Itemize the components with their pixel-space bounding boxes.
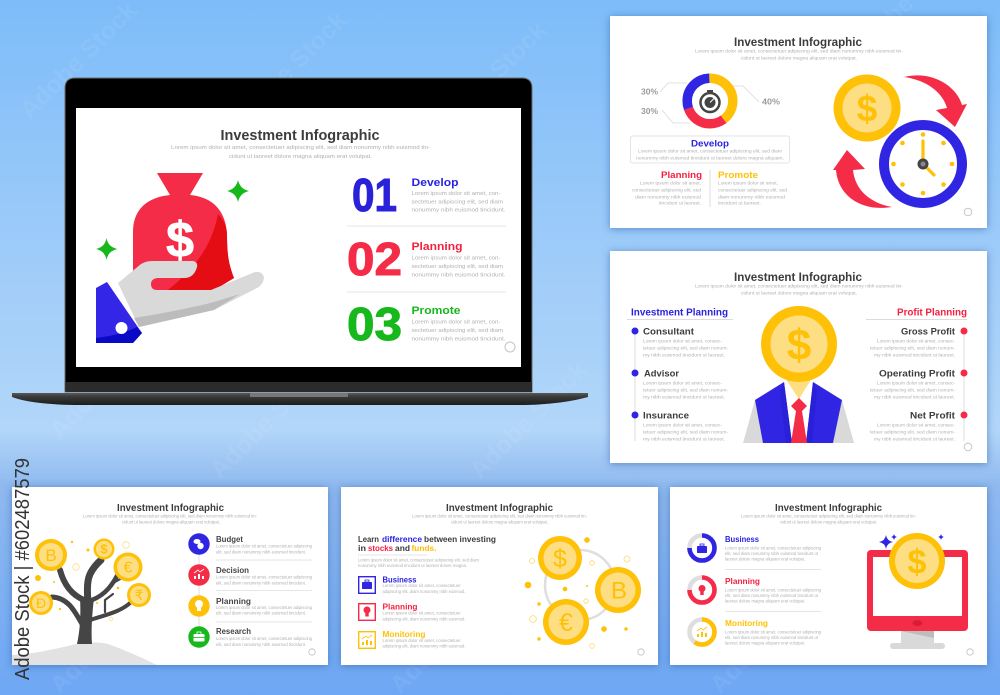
planning text: diam nonummy nibh euismod bbox=[635, 194, 702, 200]
business item: Business bbox=[382, 576, 417, 584]
advisor: Lorem ipsum dolor sit amet, consec- bbox=[643, 380, 723, 386]
gross profit: Gross Profit bbox=[901, 326, 956, 338]
consultant: Lorem ipsum dolor sit amet, consec- bbox=[643, 338, 723, 344]
left timeline bbox=[632, 328, 638, 441]
monitoring item: Monitoring bbox=[382, 630, 426, 639]
step 03 text: nonummy nibh euismod tincidunt. bbox=[412, 336, 506, 342]
slide background bbox=[341, 487, 658, 665]
page number badge bbox=[638, 649, 644, 655]
planning item: Planning bbox=[382, 602, 418, 612]
donut chart: 30% bbox=[641, 86, 658, 96]
step 01 text bbox=[412, 177, 506, 214]
icon: money bag in hand: $ bbox=[166, 212, 194, 268]
slide background bbox=[610, 16, 987, 228]
operating profit: Operating Profit bbox=[879, 368, 956, 380]
slide background bbox=[12, 487, 328, 665]
step 02 text: Lorem ipsum dolor sit amet, con- bbox=[412, 256, 501, 262]
consultant: my nibh euismod tincidunt ut laoreet. bbox=[643, 352, 725, 358]
research item bbox=[188, 626, 313, 648]
step 03 text: Promote bbox=[412, 305, 460, 317]
icon: clock bbox=[884, 125, 962, 203]
arrow: top right bbox=[904, 75, 967, 127]
icon: money tree bbox=[52, 560, 130, 644]
business ring item: elit, sed diam nonummy nibh euismod tincidunt ut bbox=[725, 551, 819, 556]
slide title: Investment Infographic bbox=[117, 503, 224, 514]
icon: euro coin bbox=[114, 552, 142, 582]
panel: laptop mockup bbox=[12, 78, 588, 405]
intro text: cidunt ut laoreet dolore magna aliquam erat volutpat. bbox=[780, 520, 877, 524]
icon: businessman with coin head bbox=[743, 306, 854, 443]
panel: slide tree bbox=[12, 487, 328, 665]
icon: dollar coin bbox=[538, 536, 582, 580]
headline: stocks bbox=[368, 544, 393, 553]
decorative coin dots bbox=[525, 537, 630, 648]
icon: hill bbox=[12, 642, 157, 665]
consultant bbox=[643, 326, 729, 358]
icon: dollar coin: $ bbox=[100, 542, 108, 556]
budget item: Lorem ipsum dolor sit amet, consectetuer adipiscing bbox=[216, 544, 313, 548]
slide background bbox=[610, 251, 987, 463]
decision item: Lorem ipsum dolor sit amet, consectetuer adipiscing bbox=[216, 574, 313, 580]
step 03 text bbox=[412, 305, 506, 342]
monitoring item: Lorem ipsum dolor sit amet, consectetuer bbox=[382, 638, 461, 643]
step 03 number: 03 bbox=[347, 298, 402, 350]
decorative coin dots bbox=[35, 541, 129, 621]
page number badge bbox=[964, 208, 972, 216]
headline description bbox=[358, 558, 479, 568]
advisor: Advisor bbox=[644, 368, 679, 380]
planning text: tincidunt ut laoreet. bbox=[659, 200, 701, 206]
right timeline bbox=[960, 328, 968, 441]
planning item bbox=[359, 602, 466, 621]
icon: sparkle small bbox=[96, 238, 118, 260]
insurance: my nibh euismod tincidunt ut laoreet. bbox=[643, 436, 725, 442]
page number badge bbox=[309, 649, 315, 655]
gross profit: my nibh euismod tincidunt ut laoreet. bbox=[874, 352, 955, 358]
laptop intro text bbox=[171, 145, 430, 160]
research item: elit, sed diam nonummy nibh euismod tincidunt. bbox=[216, 642, 306, 647]
planning item: Planning bbox=[216, 597, 251, 606]
icon: dollar coin bbox=[889, 533, 945, 589]
donut chart: 30% bbox=[641, 106, 658, 116]
develop box bbox=[630, 136, 790, 163]
watermarks: Adobe Stock bbox=[44, 316, 172, 444]
gross profit: Lorem ipsum dolor sit amet, consec- bbox=[877, 338, 956, 344]
consultant: Consultant bbox=[643, 326, 695, 338]
watermarks: Adobe Stock bbox=[424, 16, 552, 144]
consultant: tetuer adipiscing elit, sed diam nonum- bbox=[643, 346, 729, 350]
step 03 text: sectetuer adipiscing elit, sed diam bbox=[412, 328, 504, 334]
intro text bbox=[741, 514, 916, 524]
connecting ring bbox=[545, 550, 615, 620]
step 01 text: sectetuer adipiscing elit, sed diam bbox=[412, 199, 504, 205]
advisor: tetuer adipiscing elit, sed diam nonum- bbox=[643, 388, 729, 392]
icon: bitcoin coin bbox=[595, 567, 641, 613]
icon: dollar coin: $ bbox=[908, 544, 927, 582]
advisor: my nibh euismod tincidunt ut laoreet. bbox=[643, 394, 725, 400]
icon: rupee coin: ₹ bbox=[135, 588, 144, 604]
laptop intro text: cidunt ut laoreet dolore magna aliquam erat volutpat. bbox=[229, 154, 372, 160]
laptop screen bbox=[76, 108, 521, 367]
decision item: Decision bbox=[216, 566, 249, 575]
page number badge bbox=[505, 342, 515, 352]
headline: and bbox=[395, 544, 410, 553]
intro text bbox=[412, 514, 587, 524]
arrow: bottom left bbox=[833, 150, 892, 208]
planning item bbox=[188, 595, 313, 617]
heading: profit planning: Profit Planning bbox=[897, 308, 967, 318]
insurance: Lorem ipsum dolor sit amet, consec- bbox=[643, 422, 723, 428]
insurance: Insurance bbox=[643, 410, 689, 422]
panel: slide planning person bbox=[610, 251, 987, 463]
promote text: Promote bbox=[718, 170, 758, 180]
intro text: cidunt ut laoreet dolore magna aliquam erat volutpat. bbox=[741, 290, 857, 296]
budget item: Budget bbox=[216, 535, 243, 544]
icon: bitcoin coin: B bbox=[45, 546, 57, 565]
icon: euro coin bbox=[543, 599, 589, 645]
operating profit: Lorem ipsum dolor sit amet, consec- bbox=[877, 380, 956, 386]
step 02 text: nonummy nibh euismod tincidunt. bbox=[412, 272, 506, 278]
donut chart bbox=[641, 78, 780, 124]
step 02 text bbox=[412, 241, 506, 278]
headline description: Lorem ipsum dolor sit amet, consectetuer adipiscing elit, sed diam bbox=[358, 558, 479, 562]
intro text bbox=[695, 284, 904, 296]
monitoring ring item: elit, sed diam nonummy nibh euismod tincidunt ut bbox=[725, 635, 819, 640]
headline: in bbox=[358, 544, 366, 553]
planning item: Lorem ipsum dolor sit amet, consectetuer bbox=[382, 610, 461, 616]
icon: dogecoin coin bbox=[29, 591, 53, 615]
planning ring item: Lorem ipsum dolor sit amet, consectetuer adipiscing bbox=[725, 588, 822, 592]
watermarks: Adobe Stock bbox=[464, 356, 592, 484]
business item: Lorem ipsum dolor sit amet, consectetuer bbox=[382, 583, 461, 588]
insurance bbox=[643, 410, 729, 442]
planning item: elit, sed diam nonummy nibh euismod tincidunt. bbox=[216, 610, 306, 616]
headline description: nonummy nibh euismod tincidunt ut laoreet dolore magna. bbox=[358, 563, 467, 568]
monitoring item bbox=[359, 630, 466, 648]
headline: Learn bbox=[358, 535, 379, 544]
develop box: Lorem ipsum dolor sit amet, consectetuer adipiscing elit, sed diam bbox=[638, 148, 782, 154]
watermarks: Adobe Stock bbox=[204, 356, 332, 484]
step 01 text: Lorem ipsum dolor sit amet, con- bbox=[412, 191, 501, 197]
laptop title: Investment Infographic bbox=[220, 128, 380, 144]
research item: Lorem ipsum dolor sit amet, consectetuer adipiscing bbox=[216, 636, 313, 641]
icon: businessman with coin head: $ bbox=[787, 321, 811, 370]
operating profit: tetuer adipiscing elit, sed diam nonum- bbox=[870, 388, 956, 392]
planning item: Lorem ipsum dolor sit amet, consectetuer adipiscing bbox=[216, 605, 313, 610]
step 02 text: sectetuer adipiscing elit, sed diam bbox=[412, 264, 504, 270]
step 01 text: Develop bbox=[412, 177, 459, 189]
decision item: elit, sed diam nonummy nibh euismod tincidunt. bbox=[216, 580, 306, 586]
planning ring item: laoreet dolore magna aliquam erat volutpat. bbox=[725, 598, 805, 604]
business ring item: laoreet dolore magna aliquam erat volutpat. bbox=[725, 556, 805, 562]
page number badge bbox=[964, 443, 972, 451]
decision item bbox=[188, 564, 313, 586]
icon: rupee coin bbox=[127, 583, 151, 607]
donut chart: 40% bbox=[762, 96, 780, 106]
laptop intro text: Lorem ipsum dolor sit amet, consectetuer adipiscing elit, sed diam nonummy nibh euismod tin- bbox=[171, 145, 430, 151]
watermarks: Adobe Stock bbox=[14, 0, 142, 124]
gross profit: tetuer adipiscing elit, sed diam nonum- bbox=[870, 346, 956, 350]
business item bbox=[359, 576, 466, 594]
icon: dollar coin bbox=[834, 74, 900, 142]
panel: slide monitor bbox=[670, 487, 987, 665]
planning text: Lorem ipsum dolor sit amet, bbox=[640, 180, 701, 186]
headline: between investing bbox=[424, 535, 496, 544]
laptop body bbox=[12, 78, 588, 405]
monitoring ring item bbox=[690, 619, 822, 646]
budget item bbox=[188, 533, 313, 555]
headline: difference bbox=[382, 535, 422, 544]
heading: investment planning: Investment Planning bbox=[631, 308, 728, 318]
headline bbox=[358, 535, 496, 553]
slide background bbox=[670, 487, 987, 665]
business ring item bbox=[690, 535, 822, 562]
planning ring item bbox=[690, 577, 822, 604]
planning ring item: elit, sed diam nonummy nibh euismod tincidunt ut bbox=[725, 593, 819, 598]
intro text: cidunt ut laoreet dolore magna aliquam erat volutpat. bbox=[122, 520, 220, 524]
intro text: cidunt ut laoreet dolore magna aliquam erat volutpat. bbox=[741, 56, 857, 60]
icon: euro coin: € bbox=[559, 609, 573, 637]
promote text: consectetuer adipiscing elit, sed bbox=[718, 188, 788, 192]
icon: dollar coin: $ bbox=[553, 545, 567, 573]
icon: bitcoin coin bbox=[35, 539, 67, 571]
intro text: Lorem ipsum dolor sit amet, consectetuer adipiscing elit, sed diam nonummy nibh euismod tin- bbox=[83, 514, 257, 518]
headline: funds. bbox=[412, 544, 436, 553]
slide title: Investment Infographic bbox=[734, 35, 862, 49]
icon: dollar coin: $ bbox=[857, 88, 878, 129]
business ring item: Business bbox=[725, 535, 760, 544]
panel: slide develop clock bbox=[610, 16, 987, 228]
icon: euro coin: € bbox=[124, 560, 133, 576]
icon: sparkle large bbox=[227, 180, 249, 202]
operating profit bbox=[870, 368, 956, 400]
step 01 number: 01 bbox=[352, 169, 397, 221]
net profit: Net Profit bbox=[910, 410, 956, 422]
research item: Research bbox=[216, 627, 251, 636]
stock id vertical text: Adobe Stock | #602487579 bbox=[12, 458, 34, 680]
planning text: consectetuer adipiscing elit, sed bbox=[632, 188, 702, 192]
page number badge bbox=[967, 649, 973, 655]
budget item: elit, sed diam nonummy nibh euismod tincidunt. bbox=[216, 550, 306, 554]
planning text: Planning bbox=[661, 170, 702, 180]
gross profit bbox=[870, 326, 956, 358]
panel: slide stocks and funds bbox=[341, 487, 658, 665]
intro text bbox=[695, 48, 904, 60]
monitoring ring item: Lorem ipsum dolor sit amet, consectetuer adipiscing bbox=[725, 630, 822, 634]
intro text bbox=[83, 514, 257, 524]
operating profit: my nibh euismod tincidunt ut laoreet. bbox=[874, 394, 955, 400]
intro text: Lorem ipsum dolor sit amet, consectetuer adipiscing elit, sed diam nonummy nibh euismod tin- bbox=[412, 514, 587, 518]
intro text: Lorem ipsum dolor sit amet, consectetuer adipiscing elit, sed diam nonummy nibh euismod tin- bbox=[695, 284, 904, 288]
monitoring item: adipiscing elit, diam nonummy nibh euismod. bbox=[382, 644, 466, 648]
step 03 text: Lorem ipsum dolor sit amet, con- bbox=[412, 320, 501, 326]
net profit: Lorem ipsum dolor sit amet, consec- bbox=[877, 422, 956, 428]
icon: monitor bbox=[867, 550, 968, 649]
monitoring ring item: laoreet dolore magna aliquam erat volutpat. bbox=[725, 640, 805, 646]
icon: dollar coin bbox=[94, 538, 114, 560]
intro text: Lorem ipsum dolor sit amet, consectetuer adipiscing elit, sed diam nonummy nibh euismod tin- bbox=[695, 48, 904, 54]
develop box: Develop bbox=[691, 138, 729, 150]
intro text: Lorem ipsum dolor sit amet, consectetuer adipiscing elit, sed diam nonummy nibh euismod tin- bbox=[741, 514, 916, 518]
promote text: tincidunt ut laoreet. bbox=[718, 200, 761, 206]
monitoring ring item: Monitoring bbox=[725, 619, 768, 628]
icon: money bag in hand bbox=[96, 173, 264, 343]
icon: dogecoin coin: Ð bbox=[36, 595, 46, 611]
icon: bitcoin coin: B bbox=[611, 578, 627, 604]
step 01 text: nonummy nibh euismod tincidunt. bbox=[412, 208, 506, 214]
step 02 number: 02 bbox=[347, 233, 402, 285]
step 02 text: Planning bbox=[412, 241, 462, 253]
slide title: Investment Infographic bbox=[775, 503, 882, 514]
net profit: my nibh euismod tincidunt ut laoreet. bbox=[874, 436, 955, 442]
icons: sparkles bbox=[879, 534, 944, 549]
business item: adipiscing elit, diam nonummy nibh euismod. bbox=[382, 589, 466, 594]
planning ring item: Planning bbox=[725, 577, 760, 586]
advisor bbox=[643, 368, 729, 400]
slide title: Investment Infographic bbox=[734, 270, 862, 284]
promote text: Lorem ipsum dolor sit amet, bbox=[718, 180, 778, 186]
promote text bbox=[718, 170, 788, 206]
planning item: adipiscing elit, diam nonummy nibh euismod. bbox=[382, 616, 466, 621]
develop box: nonummy nibh euismod tincidunt ut laoreet dolore magna aliquam. bbox=[636, 156, 784, 160]
slide title: Investment Infographic bbox=[446, 503, 553, 514]
business ring item: Lorem ipsum dolor sit amet, consectetuer adipiscing bbox=[725, 546, 822, 550]
net profit bbox=[870, 410, 956, 442]
watermarks: Adobe Stock bbox=[224, 6, 352, 134]
intro text: cidunt ut laoreet dolore magna aliquam erat volutpat. bbox=[451, 520, 548, 524]
promote text: diam nonummy nibh euismod bbox=[718, 194, 786, 200]
net profit: tetuer adipiscing elit, sed diam nonum- bbox=[870, 430, 956, 434]
insurance: tetuer adipiscing elit, sed diam nonum- bbox=[643, 430, 729, 434]
planning text bbox=[632, 170, 702, 206]
